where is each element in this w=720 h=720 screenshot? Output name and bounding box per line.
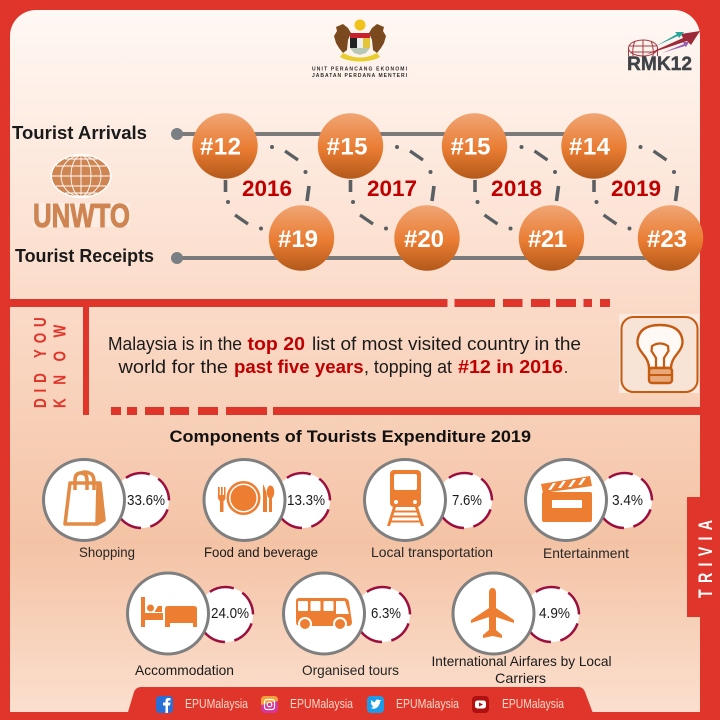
icon: clapperboard [541, 476, 592, 522]
logo: UNWTO: UNWTO [33, 197, 130, 234]
year labels: 2018 [491, 176, 542, 201]
item: accommodation 24.0% [128, 573, 253, 678]
chart: 2018 dashed link [475, 145, 558, 230]
chart: 2019 dashed link [594, 145, 678, 230]
text: agency name: UNIT PERANCANG EKONOMI [312, 66, 408, 72]
arrivals rank badges: #15 [450, 134, 490, 160]
item: local transportation 7.6%: 7.6% [452, 492, 482, 509]
year labels: 2019 [611, 176, 661, 201]
arrivals rank badges [192, 113, 627, 179]
item: shopping 33.6% [44, 460, 169, 560]
text block: did you know fact: list of most visited country in the [312, 334, 581, 354]
text block: did you know fact [108, 334, 581, 377]
ranking timeline lines [171, 128, 667, 264]
item: international airfares 4.9%: Carriers [495, 670, 546, 686]
icon: plate and cutlery [218, 481, 274, 515]
text block: did you know fact: #12 in 2016 [458, 357, 563, 377]
footer: social media bar [0, 687, 720, 720]
icon: facebook [156, 696, 173, 713]
item: entertainment 3.4%: Entertainment [543, 545, 629, 561]
receipts rank badges: #21 [528, 226, 567, 253]
arrivals rank badges: #12 [200, 134, 241, 160]
heading: components of tourists expenditure: Components of Tourists Expenditure 2019 [170, 427, 531, 446]
heading: did you know [31, 317, 70, 408]
item: organised tours 6.3% [284, 573, 410, 678]
year labels: 2016 [242, 176, 292, 201]
item: food and beverage 13.3%: 13.3% [287, 492, 325, 509]
icon: instagram [261, 696, 278, 713]
text block: did you know fact: world for the [117, 357, 228, 377]
item: accommodation 24.0%: 24.0% [211, 605, 249, 622]
icon: coat of arms [334, 20, 386, 62]
icon: youtube [472, 696, 489, 713]
heading: did you know: KNOW [51, 325, 70, 408]
item: shopping 33.6%: 33.6% [127, 492, 165, 509]
header: EPU crest and agency name: JABATAN PERDANA MENTERI [312, 73, 408, 79]
text block: did you know fact: , topping at [364, 357, 452, 377]
text block: did you know fact: top 20 [248, 334, 305, 354]
chart: 2016 dashed link [226, 145, 309, 230]
icon: train on track [387, 470, 424, 526]
logo: UNWTO [33, 154, 130, 234]
receipts rank badges: #23 [647, 226, 687, 253]
year labels: 2017 [367, 176, 417, 201]
logo: RMK12 [627, 31, 700, 75]
chart: 2017 dashed link [350, 145, 434, 230]
arrivals rank badges: #15 [326, 134, 368, 160]
item: shopping 33.6%: Shopping [79, 544, 135, 560]
icon: light bulb [619, 314, 699, 393]
footer: social media bar: EPUMalaysia [396, 696, 460, 711]
item: entertainment 3.4%: 3.4% [612, 492, 643, 509]
icon: bus [296, 598, 352, 630]
item: local transportation 7.6% [364, 460, 493, 560]
item: entertainment 3.4% [526, 460, 652, 561]
item: organised tours 6.3%: Organised tours [302, 662, 399, 678]
text block: did you know fact: Malaysia is in the [108, 334, 242, 354]
item: food and beverage 13.3%: Food and beverage [204, 544, 318, 560]
item: accommodation 24.0%: Accommodation [135, 662, 234, 678]
heading: did you know: DID YOU [31, 317, 51, 408]
heading: Tourist Receipts: Tourist Receipts [15, 246, 154, 266]
icon: twitter [367, 696, 384, 713]
tab: trivia: TRIVIA [695, 520, 717, 598]
panel: did you know frame [0, 299, 720, 415]
footer: social media bar: EPUMalaysia [290, 696, 354, 711]
footer: social media bar: EPUMalaysia [502, 696, 565, 711]
item: international airfares 4.9%: International Airfares by Local [432, 653, 612, 669]
item: food and beverage 13.3% [204, 460, 330, 560]
item: organised tours 6.3%: 6.3% [371, 605, 401, 622]
tab: trivia [687, 497, 720, 617]
receipts rank badges [269, 205, 703, 271]
icon: bed [141, 597, 197, 627]
icon: shopping bag [65, 472, 104, 524]
receipts rank badges: #20 [404, 226, 444, 253]
arrivals rank badges: #14 [569, 134, 611, 160]
icon: airplane [471, 588, 514, 638]
year labels [242, 176, 661, 201]
header: EPU crest and agency name [312, 20, 408, 79]
item: international airfares 4.9% [432, 573, 612, 686]
text block: did you know fact: . [564, 357, 568, 377]
logo: RMK12: RMK12 [627, 53, 692, 75]
item: international airfares 4.9%: 4.9% [539, 605, 570, 622]
receipts rank badges: #19 [278, 226, 318, 253]
text block: did you know fact: past five years [234, 357, 364, 377]
item: local transportation 7.6%: Local transportation [371, 544, 493, 560]
heading: Tourist Arrivals: Tourist Arrivals [12, 123, 147, 143]
footer: social media bar: EPUMalaysia [185, 696, 249, 711]
